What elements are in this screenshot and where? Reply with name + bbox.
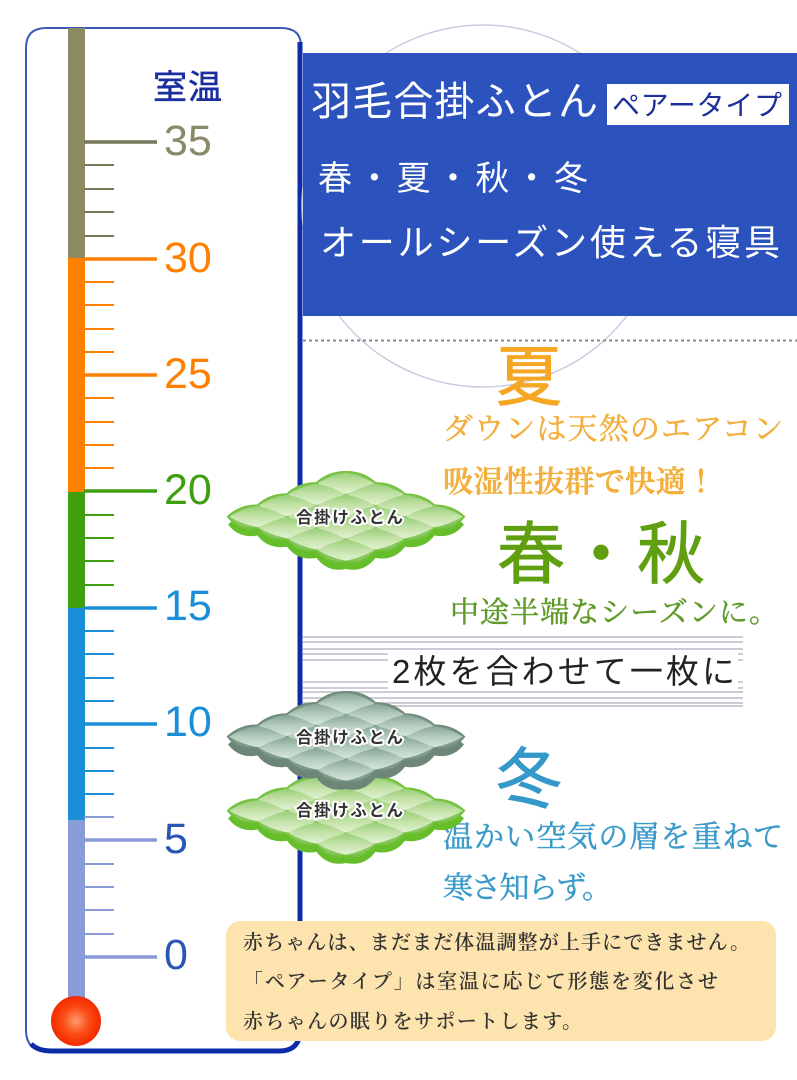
heading: summer: 夏 — [496, 340, 562, 414]
badge: pair type: ペアータイプ — [612, 90, 782, 121]
icon: thermometer bulb — [51, 996, 101, 1046]
callout: note about babies: 赤ちゃんの眠りをサポートします。 — [243, 1010, 582, 1033]
icon: single green futon: 合掛けふとん — [296, 508, 403, 527]
tick marks: green — [84, 491, 157, 585]
text: summer description: ダウンは天然のエアコン — [443, 413, 783, 446]
text: summer description — [443, 413, 783, 499]
icon: lower green futon: 合掛けふとん — [296, 801, 403, 820]
heading: room temperature: 室温 — [153, 69, 222, 107]
stripes with caption — [303, 637, 743, 706]
callout: note about babies — [226, 921, 776, 1041]
callout: note about babies: 赤ちゃんは、まだまだ体温調整が上手にできません。 — [243, 931, 750, 954]
thermometer bar: blue section — [68, 608, 85, 820]
icon: upper gray futon — [228, 692, 464, 790]
text: spring and autumn description: 中途半端なシーズンに。 — [450, 596, 778, 629]
thermometer scale — [68, 28, 157, 1005]
number 30: 30 — [164, 234, 212, 282]
number 25: 25 — [164, 350, 212, 398]
header background — [303, 53, 797, 316]
number 0: 0 — [164, 931, 188, 979]
number 10: 10 — [164, 698, 212, 746]
header line: all season bedding: オールシーズン使える寝具 — [320, 222, 780, 263]
caption: two combine into one: 2枚を合わせて一枚に — [392, 653, 735, 690]
thermometer bar: orange section — [68, 258, 85, 492]
text: winter description — [443, 821, 783, 905]
text: winter description: 寒さ知らず。 — [443, 872, 612, 905]
thermometer bar: olive section — [68, 28, 85, 258]
panel: blue header — [303, 53, 797, 316]
tick marks: orange — [84, 259, 157, 468]
decorative circle behind header — [302, 25, 664, 387]
heading: winter: 冬 — [496, 742, 562, 816]
heading: spring and autumn: 春・秋 — [497, 517, 705, 593]
thermometer bar: green section — [68, 492, 85, 608]
panel: thermometer frame — [26, 28, 301, 1052]
tick marks: periwinkle — [84, 817, 157, 957]
header line: four seasons: 春・夏・秋・冬 — [318, 160, 588, 198]
number 35: 35 — [164, 117, 212, 165]
text: summer description: 吸湿性抜群で快適！ — [443, 466, 716, 499]
number 5: 5 — [164, 815, 188, 863]
callout: note about babies: 「ペアータイプ」は室温に応じて形態を変化させ — [243, 969, 718, 993]
tick marks: blue — [84, 608, 157, 794]
text: winter description: 温かい空気の層を重ねて — [443, 821, 783, 854]
temperature numbers — [164, 117, 212, 979]
number 20: 20 — [164, 466, 212, 514]
icon: upper gray futon: 合掛けふとん — [296, 728, 403, 747]
number 15: 15 — [164, 582, 212, 630]
icon: single green futon — [228, 472, 464, 570]
tick marks: olive — [84, 142, 157, 236]
thermometer bar: periwinkle section — [68, 820, 85, 1005]
icon: lower green futon — [228, 766, 464, 864]
header title: 羽毛合掛ふとん — [311, 80, 598, 124]
